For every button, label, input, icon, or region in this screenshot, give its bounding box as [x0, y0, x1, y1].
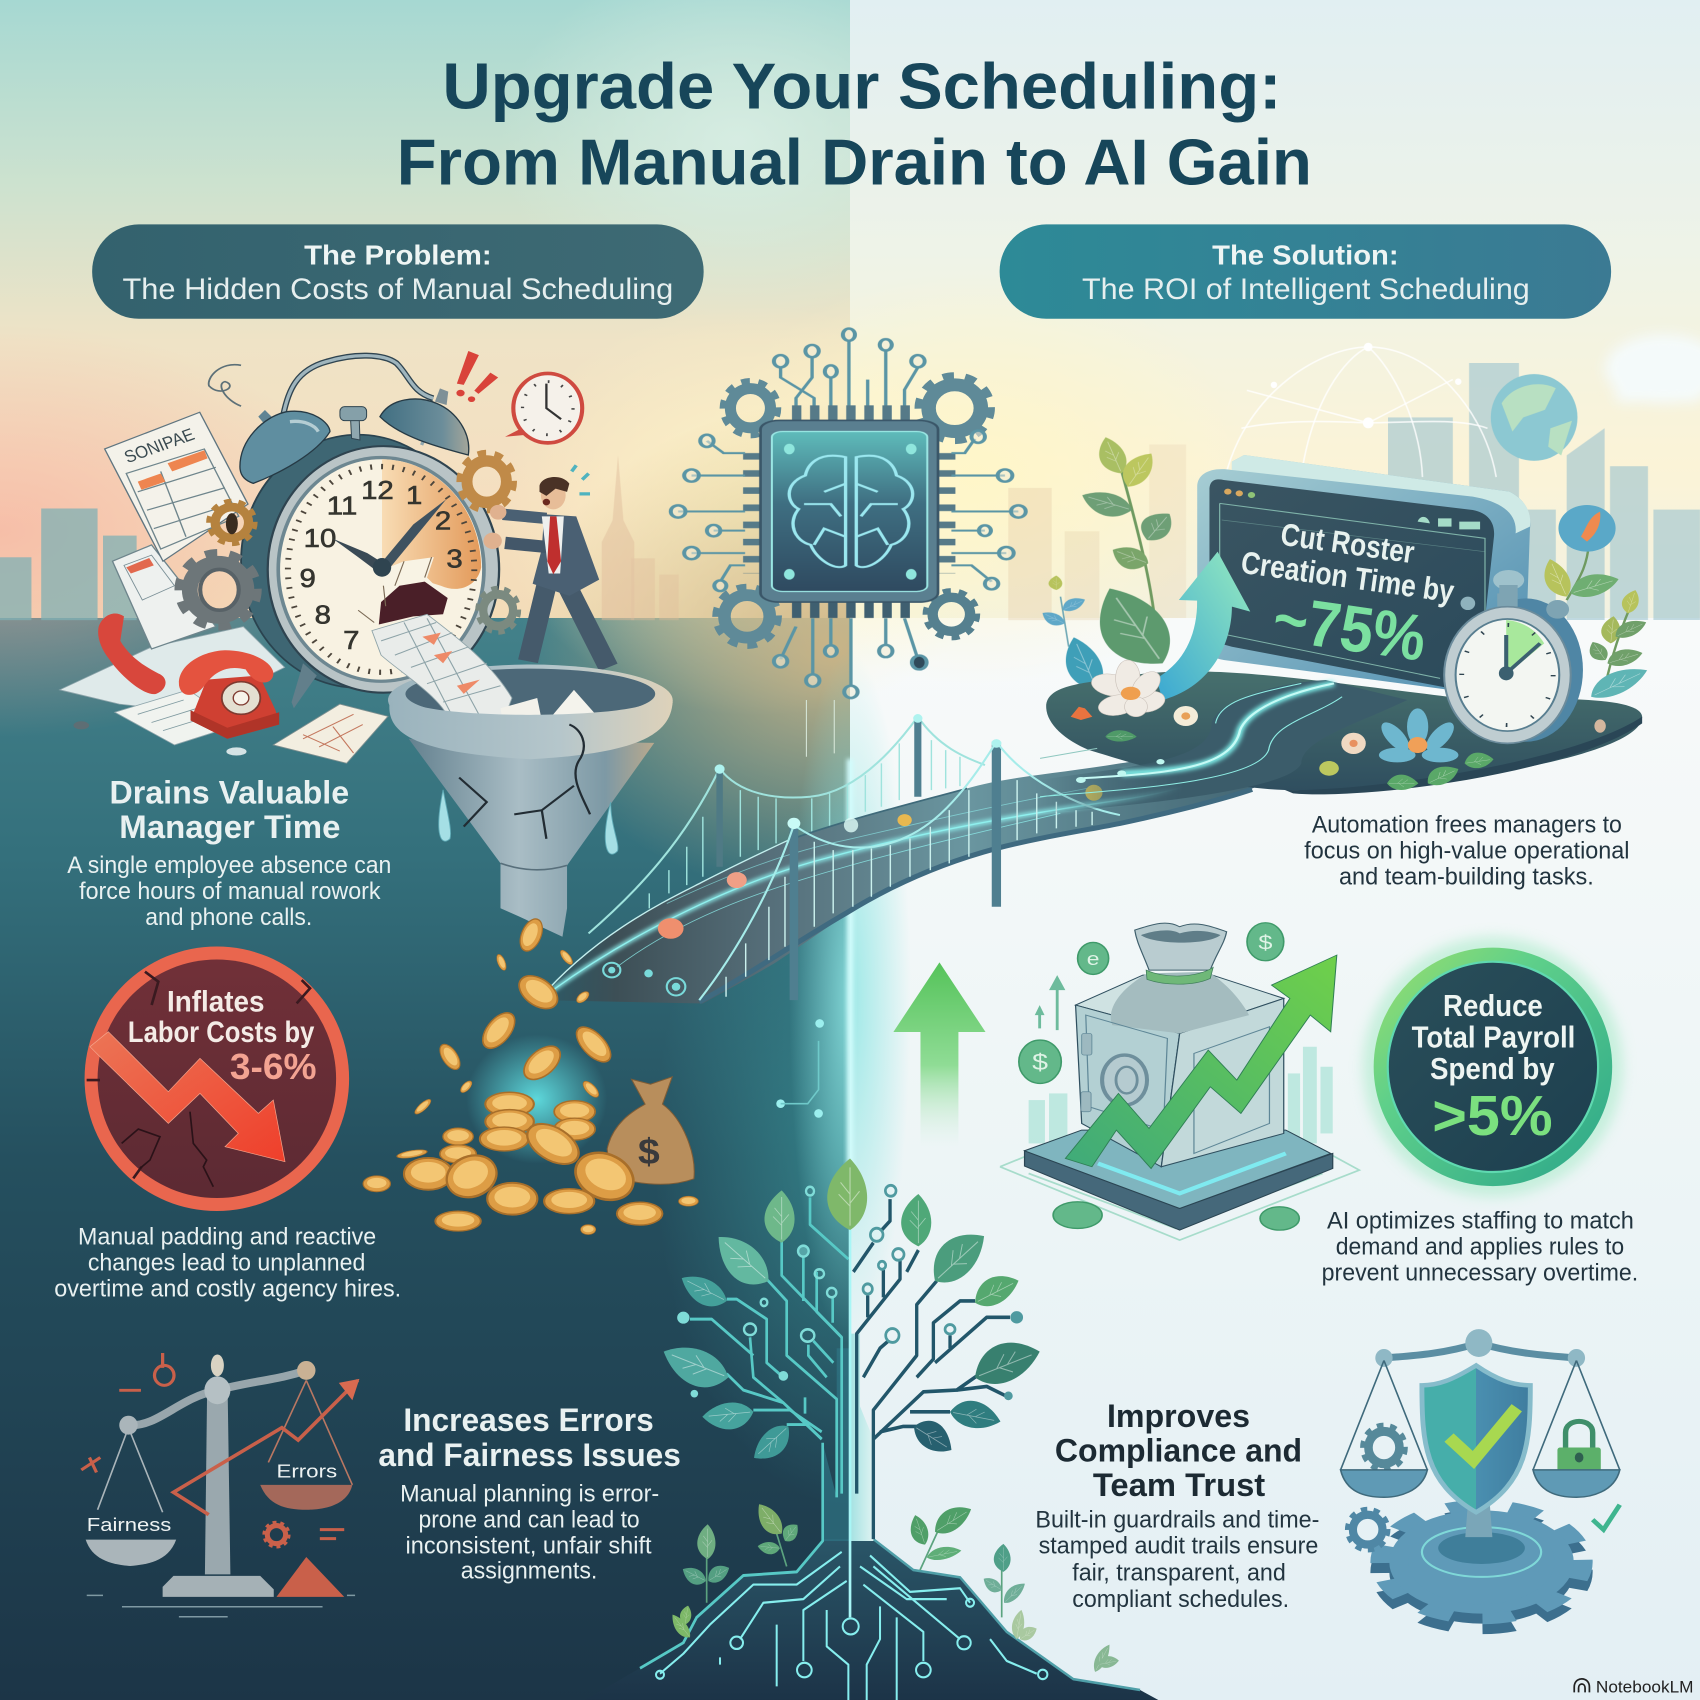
badge: inflates labor costs	[85, 946, 349, 1211]
deck	[539, 700, 1317, 1003]
illustration: tilted scale with Fairness and Errors	[81, 1353, 359, 1617]
text block: manual padding: Manual padding and reactive	[78, 1224, 376, 1251]
clock hands	[333, 539, 387, 573]
illustration: broken alarm clock and manager	[60, 351, 673, 937]
rotated screen text: roster creation stat: Creation Time by	[1239, 545, 1457, 609]
illustration: roster screen on floating island	[1039, 434, 1653, 813]
shield and check	[1422, 1365, 1530, 1512]
back cables and towers	[589, 717, 985, 933]
funnel cracks and drips	[439, 725, 618, 854]
background bars	[1029, 1047, 1333, 1143]
heading pill: the solution	[1000, 224, 1611, 319]
text block: drains manager time: Manager Time	[119, 809, 340, 845]
arrow and cracks	[87, 972, 310, 1187]
badge: reduce payroll: Reduce	[1443, 990, 1543, 1023]
illustration: shield on scale and gear	[1341, 1329, 1620, 1625]
text block: AI optimizes: AI optimizes staffing to match	[1327, 1207, 1634, 1234]
badge: inflates labor costs: 3-6%	[230, 1047, 317, 1087]
heading pill: the solution: The Solution:	[1212, 239, 1399, 271]
paper strip feeding funnel	[372, 614, 599, 725]
funnel rim front	[389, 698, 673, 730]
heading pill: the problem: The Hidden Costs of Manual Scheduling	[123, 274, 673, 306]
funnel body	[409, 739, 654, 937]
text block: compliance: fair, transparent, and	[1072, 1560, 1286, 1587]
heading pill: the solution: The ROI of Intelligent Scheduling	[1082, 274, 1530, 306]
chip gears	[724, 382, 777, 434]
badge: reduce payroll	[1363, 937, 1623, 1197]
trunk and branches: right	[853, 1199, 1010, 1539]
text block: compliance: Team Trust	[1093, 1467, 1265, 1503]
money bag	[607, 1077, 694, 1184]
text block: errors and fairness	[378, 1402, 681, 1585]
clock numerals: 8	[315, 600, 331, 629]
text block: drains manager time: and phone calls.	[145, 904, 312, 931]
text block: errors and fairness: assignments.	[461, 1558, 597, 1585]
badge: inflates labor costs: Labor Costs by	[128, 1017, 315, 1049]
bag neck and ruffle	[1135, 923, 1227, 970]
clock ticks	[288, 467, 474, 672]
clock numerals: 10	[304, 523, 336, 553]
heading pill: the problem: The Problem:	[304, 239, 492, 271]
right plants	[1537, 505, 1653, 733]
clock numerals: 1	[406, 481, 422, 510]
glowing road	[1040, 680, 1407, 813]
title: Upgrade Your Scheduling:	[442, 49, 1282, 122]
heading pill: the problem	[92, 224, 704, 319]
swirl scribble	[209, 365, 241, 406]
skyline: right side	[1008, 363, 1700, 620]
illustration: falling coins and money bag	[363, 916, 698, 1235]
brain outline	[789, 456, 913, 567]
clock numerals: 2	[435, 506, 451, 535]
text block: compliance: Improves	[1107, 1398, 1250, 1434]
tall plant	[1039, 434, 1186, 696]
blue flower	[1376, 708, 1459, 762]
speech bubble clock	[505, 373, 582, 443]
clock numerals	[299, 475, 463, 655]
badge: inflates labor costs: Inflates	[167, 987, 265, 1019]
text block: AI optimizes	[1322, 1207, 1638, 1286]
dark root hill	[583, 1539, 1160, 1700]
coin pile	[363, 1092, 698, 1235]
illustration: tilted scale with Fairness and Errors: Errors	[276, 1461, 337, 1482]
cloud	[1605, 334, 1700, 403]
bridge lights	[658, 714, 1102, 939]
illustration: safe with bag and green growth arrow	[1000, 923, 1359, 1240]
front towers and cables	[699, 742, 1120, 1000]
seedlings	[668, 1499, 1120, 1674]
text block: compliance: compliant schedules.	[1072, 1586, 1289, 1613]
text block: automation: and team-building tasks.	[1339, 864, 1594, 891]
illustration: safe with bag and green growth arrow: $	[1032, 1049, 1049, 1075]
coin glow	[466, 1034, 607, 1164]
scale pans and strings	[98, 1428, 163, 1512]
bridge rings	[603, 963, 685, 995]
scale beam and pans	[1384, 1343, 1576, 1358]
illustration: suspension bridge and glowing road	[539, 700, 1317, 1003]
green zigzag arrow	[1065, 955, 1337, 1168]
monitor screen	[1209, 479, 1494, 693]
text block: compliance: Compliance and	[1055, 1432, 1302, 1468]
text block: errors and fairness: Increases Errors	[403, 1402, 654, 1438]
trunk fill	[851, 1334, 873, 1541]
text block: automation: Automation frees managers to	[1312, 812, 1622, 839]
clock handle, knob and bells	[240, 356, 469, 483]
scale pole and beam	[205, 1393, 230, 1574]
illustration: circuit tree and roots	[583, 1158, 1160, 1700]
glowing lanes	[553, 750, 1274, 990]
text block: automation: focus on high-value operational	[1304, 838, 1630, 865]
big gear base	[1386, 1518, 1577, 1625]
clock numerals: 7	[343, 626, 359, 655]
falling coins	[413, 916, 617, 1116]
trunk and branches: left	[640, 1197, 848, 1668]
platform	[1000, 1150, 1359, 1240]
red telephone handset and base	[98, 614, 279, 739]
broken hole	[381, 557, 448, 625]
rotated screen text: roster creation stat: Cut Roster	[1279, 517, 1417, 570]
illustration: safe with bag and green growth arrow: $	[1258, 931, 1273, 954]
text block: manual padding: overtime and costly agency hires.	[54, 1276, 401, 1303]
text block: errors and fairness: Manual planning is error-	[400, 1481, 659, 1508]
island	[1046, 671, 1642, 791]
clock body	[241, 435, 475, 688]
monitor frame	[1197, 455, 1530, 697]
text block: drains manager time	[67, 774, 391, 931]
text block: compliance: Built-in guardrails and time-	[1035, 1507, 1319, 1534]
clock numerals: 9	[299, 563, 316, 593]
text block: AI optimizes: demand and applies rules to	[1336, 1233, 1624, 1260]
text block: automation	[1304, 812, 1630, 891]
text block: manual padding	[54, 1224, 401, 1303]
glowing centre line and roots	[656, 1174, 1047, 1700]
small flowers	[1071, 707, 1092, 720]
badge: reduce payroll: Total Payroll	[1412, 1021, 1575, 1054]
text block: drains manager time: A single employee absence can	[67, 852, 391, 879]
rotated screen text: roster creation stat	[1239, 517, 1457, 675]
clock numerals: 3	[446, 544, 463, 573]
rising arrow	[1156, 552, 1250, 700]
chip pins	[792, 394, 913, 432]
title	[397, 49, 1312, 198]
scale labels: Fairness	[87, 1515, 171, 1536]
small warning marks	[81, 1353, 344, 1547]
NotebookLM watermark: NotebookLM	[1596, 1677, 1693, 1696]
green coins	[1019, 923, 1299, 1230]
clock numerals: 11	[327, 491, 357, 520]
stopwatch	[1444, 570, 1583, 743]
illustration: falling coins and money bag: $	[638, 1131, 660, 1172]
title: From Manual Drain to AI Gain	[397, 125, 1312, 198]
circuit nodes above tree on dark side	[776, 1019, 824, 1118]
text block: compliance	[1035, 1398, 1319, 1613]
clock numerals: 12	[361, 475, 394, 504]
rotated screen text: roster creation stat: ~75%	[1269, 581, 1430, 675]
text block: compliance: stamped audit trails ensure	[1039, 1533, 1318, 1560]
gears	[210, 502, 254, 543]
orange clock wedge	[382, 459, 481, 589]
paper stack and schedule sheets	[60, 412, 388, 763]
badge: reduce payroll: Spend by	[1430, 1053, 1555, 1086]
text block: errors and fairness: inconsistent, unfair shift	[405, 1533, 652, 1560]
paper stack and schedule sheets: SONIPAE	[121, 424, 197, 467]
chip body	[760, 420, 938, 602]
rising red arrow	[173, 1380, 358, 1515]
text block: manual padding: changes lead to unplanned	[88, 1250, 365, 1277]
badge: reduce payroll: >5%	[1432, 1084, 1553, 1147]
circuit leads	[678, 341, 1018, 686]
text block: errors and fairness: prone and can lead to	[418, 1507, 640, 1534]
text block: drains manager time: Drains Valuable	[110, 774, 349, 810]
text block: AI optimizes: prevent unnecessary overtime.	[1322, 1259, 1638, 1286]
alarm exclamation marks	[456, 351, 498, 402]
stressed manager figure	[483, 465, 608, 667]
skyline: left side	[0, 455, 679, 620]
ring nodes	[678, 1187, 836, 1396]
white flower	[1088, 660, 1169, 719]
safe cube and bag	[1076, 975, 1284, 1033]
illustration: wireframe globe dome and earth	[1225, 343, 1577, 477]
big green up arrow	[893, 962, 986, 1149]
illustration: AI chip with brain, gears and circuits	[671, 329, 1026, 698]
text block: drains manager time: force hours of manual rowork	[79, 878, 381, 905]
text block: errors and fairness: and Fairness Issues	[378, 1437, 681, 1473]
illustration: safe with bag and green growth arrow: e	[1087, 949, 1099, 970]
tree leaves	[657, 1158, 1045, 1469]
